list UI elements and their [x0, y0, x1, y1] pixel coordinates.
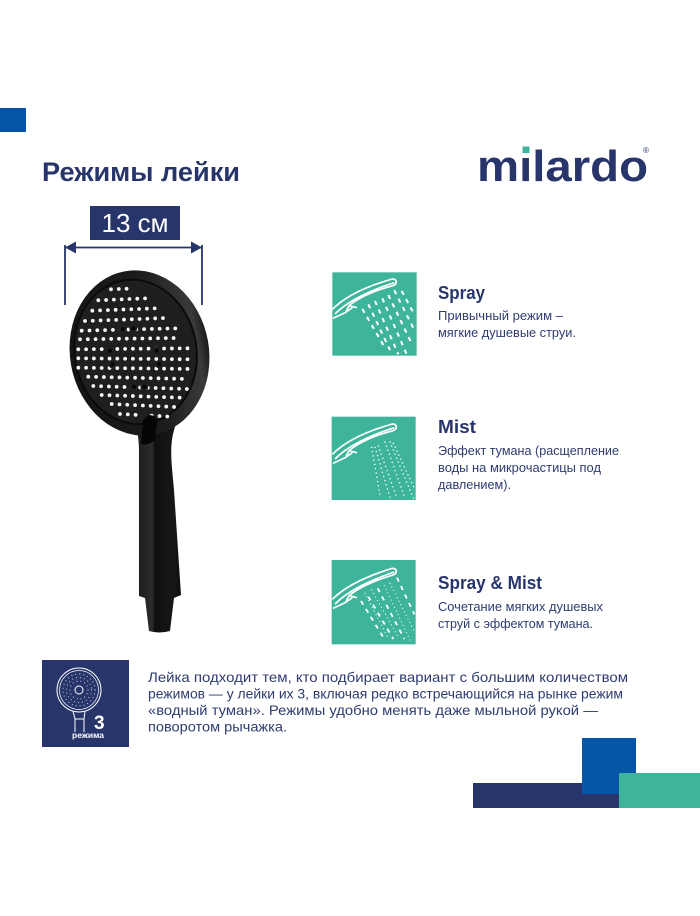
- description: мягкие душевые струи.: [438, 325, 576, 340]
- description paragraph: режимов — у лейки их 3, включая редко встречающийся на рынке режим: [148, 686, 623, 702]
- description: Привычный режим –: [438, 308, 564, 323]
- description: Эффект тумана (расщепление: [438, 443, 619, 458]
- description: Сочетание мягких душевых: [438, 599, 603, 614]
- heading: Spray & Mist: [438, 573, 542, 593]
- description paragraph: «водный туман». Режимы удобно менять даже мыльной рукой —: [148, 702, 598, 718]
- description: [438, 599, 603, 631]
- icon: spray: [332, 272, 417, 356]
- mode: Spray: [332, 272, 576, 356]
- heading: Spray: [438, 283, 485, 303]
- label: режима: [72, 730, 104, 740]
- icon: shower head outline: [57, 668, 101, 732]
- description: воды на микрочастицы под: [438, 460, 601, 475]
- description: [438, 443, 619, 492]
- handle: [136, 424, 181, 632]
- icon: spray and mist: [332, 560, 416, 644]
- centre holes: [107, 325, 162, 390]
- description paragraph: поворотом рычажка.: [148, 718, 287, 734]
- mode: Mist: [332, 417, 619, 500]
- dimension: 13 cm: [65, 206, 202, 305]
- icon: mist: [332, 417, 416, 500]
- logo: milardo: ®: [643, 146, 649, 155]
- mode lever: [141, 415, 157, 444]
- description paragraph: [148, 669, 628, 734]
- number 3: 3: [94, 713, 105, 734]
- logo: milardo: milardo: [477, 142, 648, 191]
- head face: [63, 270, 208, 434]
- corner blocks: [473, 738, 700, 808]
- heading: Mist: [438, 417, 476, 437]
- dimension: 13 cm: 13 см: [102, 208, 168, 238]
- mode: Spray & Mist: [332, 560, 603, 644]
- description: [438, 308, 576, 340]
- shower head product photo: [57, 259, 222, 632]
- head rim: [57, 259, 222, 447]
- description paragraph: Лейка подходит тем, кто подбирает вариант с большим количеством: [148, 669, 628, 685]
- title: Режимы лейки: [42, 157, 240, 187]
- description: давлением).: [438, 477, 511, 492]
- spray nozzle dots: [78, 289, 193, 416]
- corner accent square: [0, 108, 26, 132]
- description: струй с эффектом тумана.: [438, 616, 593, 631]
- badge: 3 modes: [42, 660, 129, 747]
